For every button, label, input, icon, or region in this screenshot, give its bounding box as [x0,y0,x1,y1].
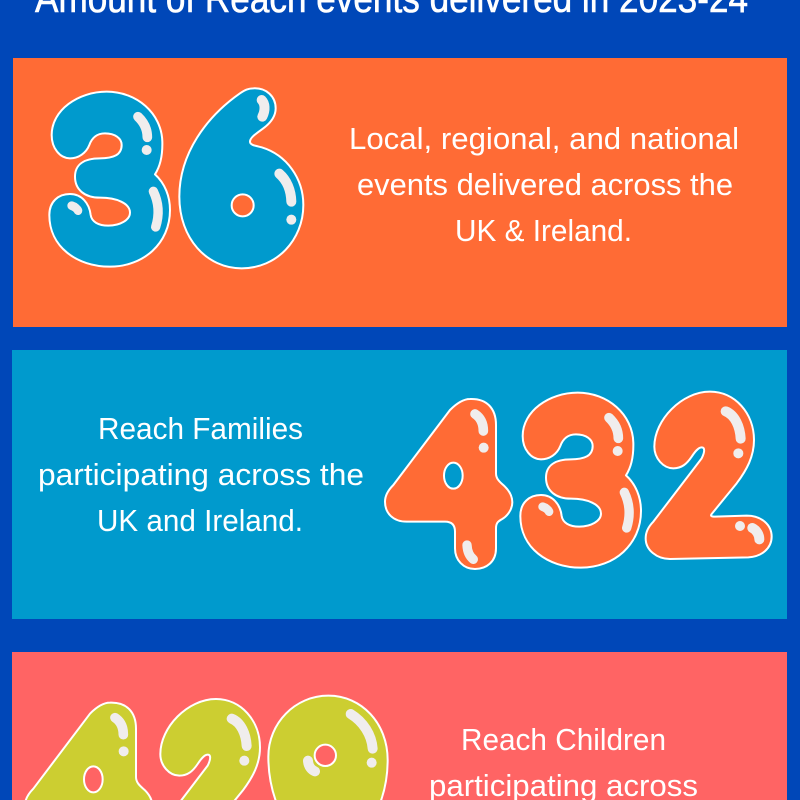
text: children description [429,722,698,800]
text: families description: Reach Families [98,411,303,446]
text: families description: participating across the [38,457,364,492]
text: events description: Local, regional, and national [349,121,739,156]
text: families description: UK and Ireland. [97,503,303,538]
number: 36 [49,88,303,268]
text: events description: UK & Ireland. [455,213,632,248]
panel: 429 children [12,652,787,800]
text: events description [349,121,739,248]
text: families description [38,411,364,538]
number: 429 [25,696,388,800]
text: events description: events delivered across the [357,167,733,202]
panel: 36 events [13,58,787,327]
number: 432 [385,392,772,569]
text: children description: Reach Children [461,722,666,757]
panel: 432 families [12,350,787,619]
